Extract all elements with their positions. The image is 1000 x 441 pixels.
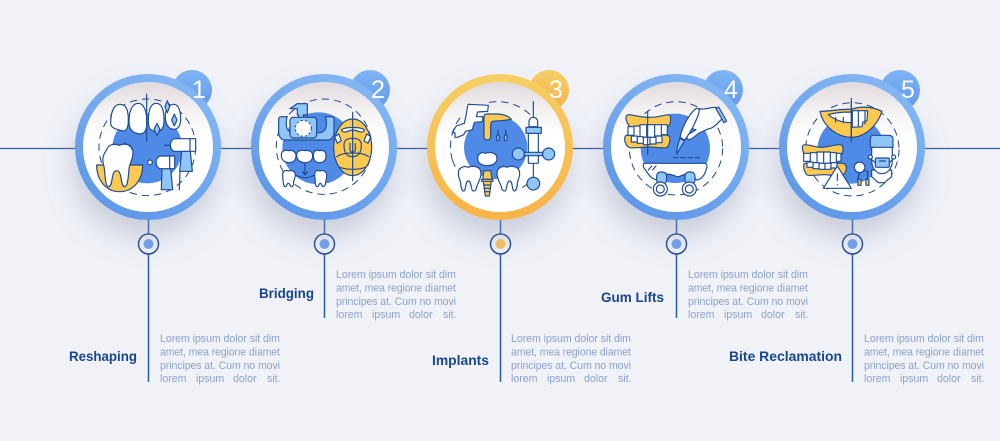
description 5: Lorem ipsum dolor sit dim	[864, 333, 984, 345]
connector line 3	[500, 215, 502, 382]
description 4: Lorem ipsum dolor sit dim	[688, 269, 808, 281]
number 3: 3	[549, 76, 563, 104]
heading: Implants: Implants	[432, 352, 489, 368]
description 1: sit.	[267, 373, 281, 385]
number 1: 1	[192, 76, 206, 104]
description 3: amet, mea regione diamet	[511, 346, 631, 358]
step 3: Implants	[427, 70, 632, 385]
number 4: 4	[724, 76, 738, 104]
description 3: ipsum	[547, 373, 575, 385]
description 1: amet, mea regione diamet	[160, 346, 280, 358]
icon: dental implant	[450, 102, 555, 196]
badge 1	[172, 70, 212, 110]
description 3: dolor	[584, 373, 608, 385]
badge 5	[880, 70, 920, 110]
description 4: dolor	[761, 309, 785, 321]
description 5: dolor	[937, 373, 961, 385]
icon: reshaping teeth	[97, 94, 196, 196]
ring 1	[75, 74, 221, 220]
timeline axis	[0, 148, 1000, 150]
heading: Reshaping: Reshaping	[69, 348, 137, 364]
description 5: sit.	[971, 373, 985, 385]
description 5: principes at. Cum no movi	[864, 360, 984, 372]
number 5: 5	[901, 76, 915, 104]
description 3: lorem	[511, 373, 538, 385]
ring 2	[251, 74, 397, 220]
description 4: ipsum	[724, 309, 752, 321]
description 3: principes at. Cum no movi	[511, 360, 631, 372]
description 2: sit.	[443, 309, 457, 321]
icon: bite reclamation	[802, 98, 899, 196]
description 2: principes at. Cum no movi	[336, 296, 456, 308]
step 5: Bite Reclamation	[729, 70, 985, 385]
description 2: lorem	[336, 309, 363, 321]
badge 4	[703, 70, 743, 110]
icon: dental bridge	[276, 99, 372, 194]
ring 3	[427, 74, 573, 220]
ring 4	[603, 74, 749, 220]
connector line 5	[852, 215, 854, 382]
description 5	[864, 333, 985, 385]
description 1: Lorem ipsum dolor sit dim	[160, 333, 280, 345]
step 2: Bridging	[251, 70, 457, 321]
heading: Bite Reclamation: Bite Reclamation	[729, 348, 842, 364]
description 2: amet, mea regione diamet	[336, 282, 456, 294]
ring 5	[779, 74, 925, 220]
description 4: lorem	[688, 309, 715, 321]
heading: Bridging: Bridging	[259, 285, 314, 301]
connector line 1	[148, 215, 150, 382]
description 4: principes at. Cum no movi	[688, 296, 808, 308]
description 5: lorem	[864, 373, 891, 385]
description 2: Lorem ipsum dolor sit dim	[336, 269, 456, 281]
number 2: 2	[371, 76, 385, 104]
description 1: ipsum	[196, 373, 224, 385]
description 1	[160, 333, 281, 385]
badge 2	[350, 70, 390, 110]
description 3: Lorem ipsum dolor sit dim	[511, 333, 631, 345]
node marker 3	[490, 234, 510, 254]
step 1: Reshaping	[69, 70, 281, 385]
description 1: principes at. Cum no movi	[160, 360, 280, 372]
description 4: sit.	[795, 309, 809, 321]
badge 3	[529, 70, 569, 110]
description 4	[688, 269, 809, 321]
description 4: amet, mea regione diamet	[688, 282, 808, 294]
icon: gum lift surgery	[625, 102, 727, 196]
step 4: Gum Lifts	[601, 70, 809, 321]
node marker 4	[666, 234, 686, 254]
description 5: amet, mea regione diamet	[864, 346, 984, 358]
node marker 5	[842, 234, 862, 254]
node marker 2	[314, 234, 334, 254]
description 5: ipsum	[900, 373, 928, 385]
connector line 4	[676, 215, 678, 318]
description 3	[511, 333, 632, 385]
description 1: dolor	[233, 373, 257, 385]
node marker 1	[138, 234, 158, 254]
description 2: dolor	[409, 309, 433, 321]
heading: Gum Lifts: Gum Lifts	[601, 289, 664, 305]
connector line 2	[324, 215, 326, 318]
description 3: sit.	[618, 373, 632, 385]
description 2: ipsum	[372, 309, 400, 321]
description 2	[336, 269, 457, 321]
description 1: lorem	[160, 373, 187, 385]
